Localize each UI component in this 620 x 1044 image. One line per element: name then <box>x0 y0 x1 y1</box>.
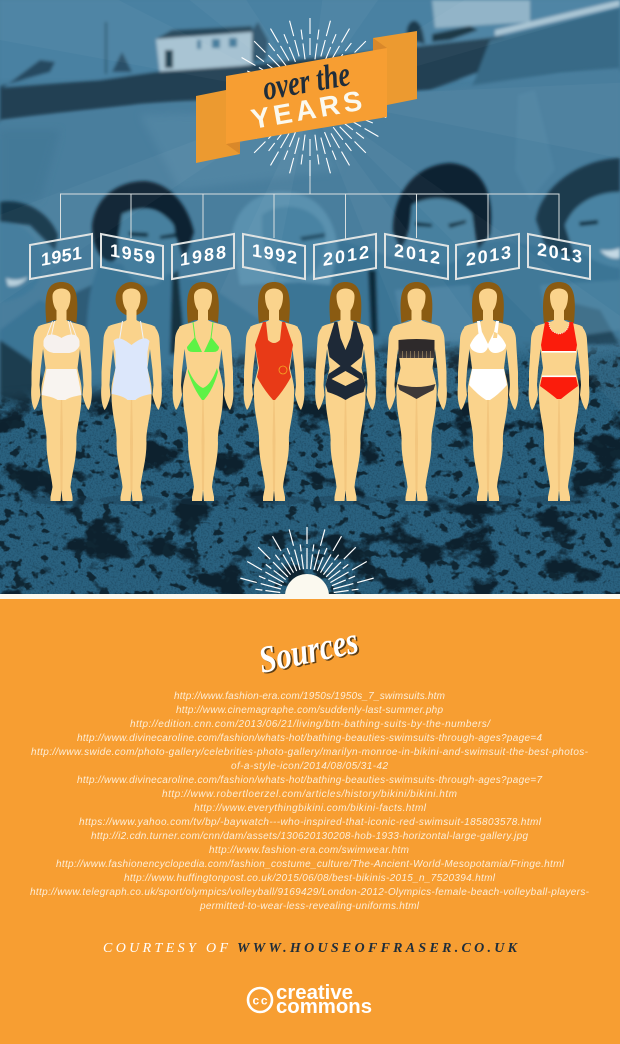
source url list: permitted-to-wear-less-revealing-uniforms.html <box>199 901 420 912</box>
lifebuoy emblem <box>279 366 287 374</box>
figure 2012: navy cross-front one-piece <box>314 282 378 505</box>
source url list: http://i2.cdn.turner.com/cnn/dam/assets/130620130208-hob-1933-horizontal-large-gallery.jpg <box>91 831 528 842</box>
creative commons logo <box>248 982 372 1018</box>
year label: 2012: 2012 <box>323 242 369 270</box>
connector lines <box>60 175 559 240</box>
source url list: http://www.cinemagraphe.com/suddenly-last-summer.php <box>176 705 443 716</box>
creative commons logo: cc <box>252 994 268 1008</box>
source url list: http://www.fashionencyclopedia.com/fashion_costume_culture/The-Ancient-World-Mesopotamia/Fringe.html <box>56 859 565 870</box>
figure 2012: fringed bandeau bikini <box>384 282 448 505</box>
year label: 1951: 1951 <box>41 243 82 270</box>
year label: 2013: 2013 <box>466 242 511 270</box>
figure 1951: white halter and high-waist bottoms <box>30 282 94 505</box>
woman 2 <box>92 181 194 262</box>
year label: 1988 <box>172 234 234 279</box>
white divider band <box>0 594 620 599</box>
background photo: beach scene <box>0 0 620 594</box>
figure 1959: pale blue one-piece <box>100 282 164 505</box>
year label: 2012 <box>314 234 376 279</box>
source url list: http://www.swide.com/photo-gallery/celebrities-photo-gallery/marilyn-monroe-in-bikini-and-swimsuit-the-best-photos- <box>31 747 589 758</box>
woman 5 <box>536 158 620 260</box>
courtesy line: COURTESY OF <box>103 941 228 956</box>
figure 1992: red lifeguard one-piece <box>242 282 306 505</box>
faces and bodies <box>0 158 620 410</box>
dark sand foreground <box>0 338 620 594</box>
sky rays <box>0 0 620 430</box>
orange sources panel <box>0 599 620 1044</box>
year label: 2012: 2012 <box>394 240 440 268</box>
sand bank <box>0 68 619 124</box>
woman 4 <box>393 163 491 250</box>
year label: 1959: 1959 <box>110 240 155 268</box>
bottom sunburst <box>240 527 374 594</box>
woman 1 <box>0 201 58 250</box>
figure 2013: white halter bikini <box>456 282 520 505</box>
source url list: of-a-style-icon/2014/08/05/31-42 <box>231 761 388 772</box>
source url list: http://edition.cnn.com/2013/06/21/living/btn-bathing-suits-by-the-numbers/ <box>130 719 491 730</box>
courtesy line <box>103 941 519 956</box>
year label: 2013 <box>456 234 519 279</box>
year label: 2013 <box>528 234 590 279</box>
source url list: https://www.yahoo.com/tv/bp/-baywatch---who-inspired-that-iconic-red-swimsuit-185803578.html <box>79 817 542 828</box>
title banner <box>196 31 417 163</box>
sky and houses <box>0 0 620 122</box>
year label: 1959 <box>101 234 163 279</box>
year label: 2013: 2013 <box>537 239 582 267</box>
figure 2013: red sporty bikini <box>527 282 591 505</box>
woman 3 <box>232 192 338 285</box>
source url list: http://www.huffingtonpost.co.uk/2015/06/08/best-bikinis-2015_n_7520394.html <box>124 873 496 884</box>
creative commons logo: commons <box>276 996 372 1018</box>
year label: 1951 <box>30 234 92 279</box>
figure 1988: green bikini <box>171 282 235 505</box>
source url list: http://www.robertloerzel.com/articles/history/bikini/bikini.htm <box>162 789 457 800</box>
source url list: http://www.everythingbikini.com/bikini-facts.html <box>194 803 427 814</box>
source url list: http://www.fashion-era.com/swimwear.htm <box>209 845 409 856</box>
source url list: http://www.fashion-era.com/1950s/1950s_7_swimsuits.htm <box>174 691 445 702</box>
year label: 1988: 1988 <box>180 242 226 270</box>
creative commons logo: creative <box>276 982 353 1004</box>
source url list: http://www.divinecaroline.com/fashion/whats-hot/bathing-beauties-swimsuits-through-ages?page=7 <box>77 775 542 786</box>
year label: 1992: 1992 <box>252 240 297 268</box>
year label: 2012 <box>385 234 448 279</box>
year label: 1992 <box>243 234 305 279</box>
sources heading: Sources <box>257 621 363 683</box>
source url list: http://www.telegraph.co.uk/sport/olympics/volleyball/9169429/London-2012-Olympics-female-beach-volleyball-players- <box>30 887 590 898</box>
title: YEARS: YEARS <box>249 85 364 135</box>
source url list: http://www.divinecaroline.com/fashion/whats-hot/bathing-beauties-swimsuits-through-ages?page=4 <box>77 733 542 744</box>
sunburst behind banner <box>227 14 393 180</box>
sources heading: Sources <box>255 620 362 682</box>
courtesy line: WWW.HOUSEOFFRASER.CO.UK <box>237 941 519 956</box>
title: over the: over the <box>260 54 353 108</box>
source url list <box>30 691 590 912</box>
